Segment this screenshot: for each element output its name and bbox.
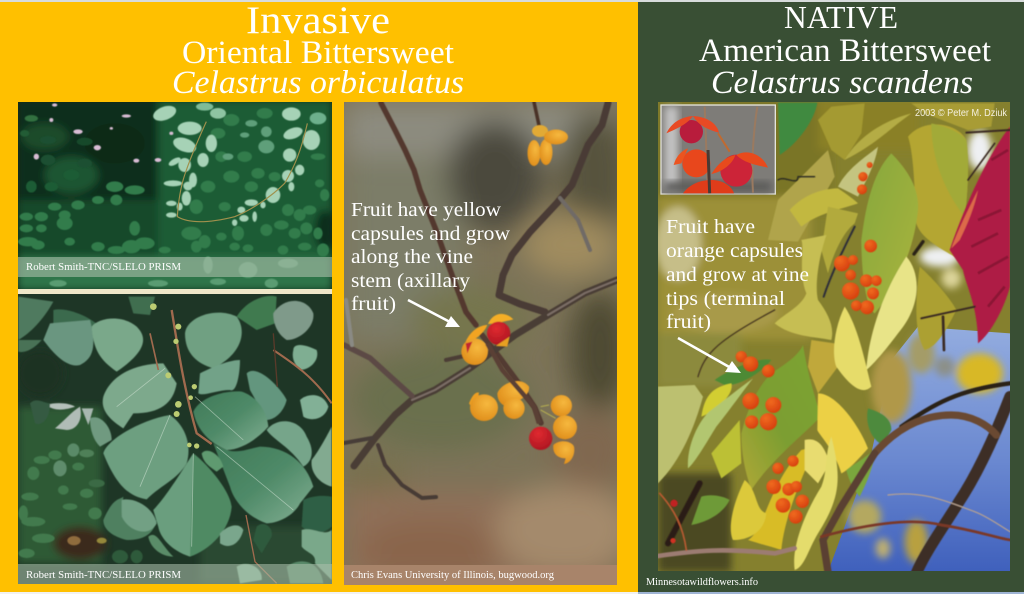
flowers <box>34 103 173 163</box>
title: native heading: NATIVE <box>784 0 898 35</box>
background tones <box>655 100 918 572</box>
arrow <box>678 338 741 373</box>
lit leaves <box>151 103 326 226</box>
caption: photo credit <box>18 257 332 277</box>
title: native heading: American Bittersweet <box>699 33 991 69</box>
ground leaves <box>19 443 143 563</box>
mid-tone leaves <box>18 108 329 257</box>
annotation: orange capsules: Fruit have <box>666 217 755 238</box>
title: invasive heading: Invasive <box>246 0 390 42</box>
main fruit cluster <box>461 314 577 464</box>
leaves <box>658 103 995 570</box>
title: native heading <box>699 0 991 100</box>
red leaf <box>950 127 1010 343</box>
title: native heading: Celastrus scandens <box>711 65 973 100</box>
panel: invasive background <box>0 0 638 594</box>
caption: photo credit <box>18 564 332 584</box>
annotation: orange capsules: fruit) <box>666 312 711 333</box>
large leaves <box>18 296 332 583</box>
title: invasive heading <box>172 0 464 100</box>
annotation: orange capsules: orange capsules <box>666 241 803 262</box>
caption: photo credit: Robert Smith-TNC/SLELO PRISM <box>26 570 182 581</box>
annotation: orange capsules <box>666 217 809 333</box>
photo: oriental bittersweet leaves <box>18 294 332 584</box>
photo: oriental bittersweet fruit on branch <box>344 102 617 585</box>
annotation: yellow capsules: fruit) <box>351 294 396 315</box>
divider strip <box>18 289 332 294</box>
vine stem <box>177 122 307 222</box>
caption: photo credit: Robert Smith-TNC/SLELO PRISM <box>26 262 182 273</box>
branches <box>658 130 1010 573</box>
annotation: yellow capsules: Fruit have yellow <box>351 200 501 221</box>
veins and stems <box>117 368 293 547</box>
berries <box>670 162 882 543</box>
credit: website: Minnesotawildflowers.info <box>646 577 758 588</box>
top fruit cluster <box>528 125 568 166</box>
inset: fruit close-up <box>661 105 775 194</box>
caption: photo credit <box>344 565 617 585</box>
title: invasive heading: Oriental Bittersweet <box>182 35 454 71</box>
annotation: orange capsules: tips (terminal <box>666 289 786 310</box>
title: invasive heading: Celastrus orbiculatus <box>172 65 464 100</box>
panel: native background <box>638 0 1024 594</box>
photo: vine climbing over foliage <box>18 102 332 289</box>
branches <box>344 102 617 498</box>
annotation: yellow capsules: along the vine <box>351 247 473 268</box>
sky <box>828 130 1010 572</box>
lower band leaves <box>49 256 298 288</box>
annotation: orange capsules: and grow at vine <box>666 265 809 286</box>
photo: american bittersweet fruit and yellow leaves <box>658 102 1010 571</box>
annotation: yellow capsules: capsules and grow <box>351 224 510 245</box>
annotation: yellow capsules <box>351 200 510 315</box>
arrow <box>408 300 460 327</box>
caption: photo credit: Chris Evans University of Illinois, bugwood.org <box>351 570 555 581</box>
annotation: yellow capsules: stem (axillary <box>351 271 470 292</box>
